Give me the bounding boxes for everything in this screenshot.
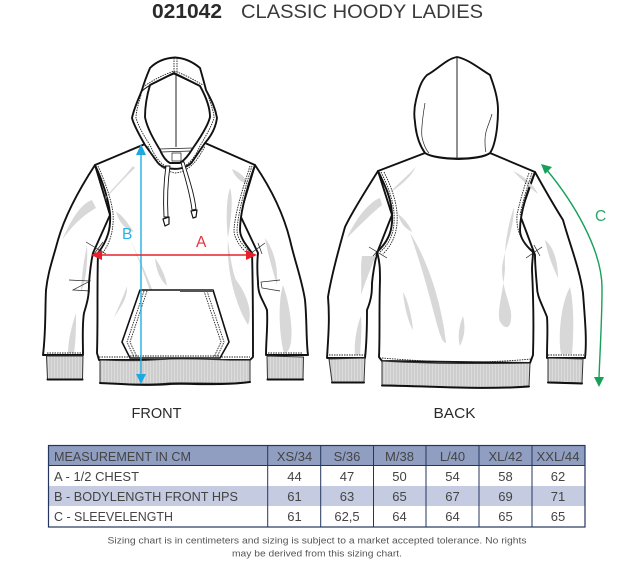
table row B: 65 xyxy=(392,489,407,504)
front hoodie illustration xyxy=(43,58,308,385)
table row A: 62 xyxy=(551,469,565,484)
footnote: may be derived from this sizing chart. xyxy=(232,548,402,560)
table row A: A - 1/2 CHEST xyxy=(54,469,139,484)
front underarm folds xyxy=(69,242,280,291)
table header row: L/40 xyxy=(440,449,465,464)
back label: BACK xyxy=(434,406,476,422)
back right sleeve xyxy=(520,172,586,358)
front left cuff xyxy=(46,356,83,380)
back hood seam and folds xyxy=(422,57,492,159)
front hood inner opening xyxy=(145,73,210,163)
title: CLASSIC HOODY LADIES xyxy=(241,2,483,23)
table row A: 44 xyxy=(287,469,302,484)
table row C: C - SLEEVELENGTH xyxy=(54,509,173,524)
front hem rib xyxy=(100,359,250,385)
sizing table xyxy=(48,446,585,527)
footnote: Sizing chart is in centimeters and sizing is subject to a market accepted tolerance. No rights xyxy=(108,536,527,546)
back hood xyxy=(414,57,498,159)
measurement A arrow: A xyxy=(196,234,207,251)
table row C: 65 xyxy=(551,509,565,524)
table header row: XL/42 xyxy=(489,449,522,464)
front left sleeve xyxy=(43,165,110,355)
table row B: 61 xyxy=(287,489,302,504)
footnote xyxy=(108,536,527,560)
title: 021042 xyxy=(152,1,222,23)
back hoodie illustration xyxy=(327,57,586,388)
table row A: 50 xyxy=(392,469,407,484)
table row C: 62,5 xyxy=(334,509,360,524)
front hood outer xyxy=(132,58,217,169)
table row B: 71 xyxy=(551,489,565,504)
back right cuff xyxy=(548,358,583,384)
table header row: XXL/44 xyxy=(536,449,580,464)
table row A: 47 xyxy=(340,469,354,484)
table header row: MEASUREMENT IN CM xyxy=(54,449,191,464)
table row A: 58 xyxy=(498,469,513,484)
front right cuff xyxy=(267,356,304,380)
front label: FRONT xyxy=(132,406,182,422)
hood seam and stitching xyxy=(136,58,214,173)
back left cuff xyxy=(329,358,365,382)
table row C xyxy=(54,509,565,524)
table row C: 65 xyxy=(498,509,513,524)
back shading xyxy=(347,112,573,355)
front shading xyxy=(62,166,291,353)
measurement A arrow xyxy=(91,234,257,260)
table row B: 63 xyxy=(340,489,354,504)
table row C: 64 xyxy=(392,509,407,524)
front armhole and waist stitching xyxy=(47,166,303,357)
measurement C arrow xyxy=(541,164,606,387)
table row A xyxy=(54,469,565,484)
back left sleeve xyxy=(327,171,392,358)
table row B: B - BODYLENGTH FRONT HPS xyxy=(54,489,238,504)
front body xyxy=(95,143,255,360)
measurement B arrow: B xyxy=(122,226,132,243)
measurement B arrow xyxy=(122,144,146,384)
table row C: 64 xyxy=(445,509,460,524)
title xyxy=(152,1,483,23)
back hem rib xyxy=(382,361,530,388)
table header row: XS/34 xyxy=(277,449,312,464)
table header row xyxy=(48,446,585,466)
measurement C arrow: C xyxy=(595,208,606,225)
table header row: S/36 xyxy=(334,449,360,464)
front right sleeve xyxy=(240,165,308,355)
table row A: 54 xyxy=(445,469,460,484)
back stitching xyxy=(329,172,584,362)
drawstrings xyxy=(163,162,197,226)
table row B: 69 xyxy=(498,489,513,504)
kangaroo pocket xyxy=(122,289,229,358)
table row B xyxy=(48,486,585,506)
table header row: M/38 xyxy=(385,449,414,464)
back body xyxy=(377,153,535,363)
table row B: 67 xyxy=(445,489,460,504)
table row C: 61 xyxy=(287,509,302,524)
